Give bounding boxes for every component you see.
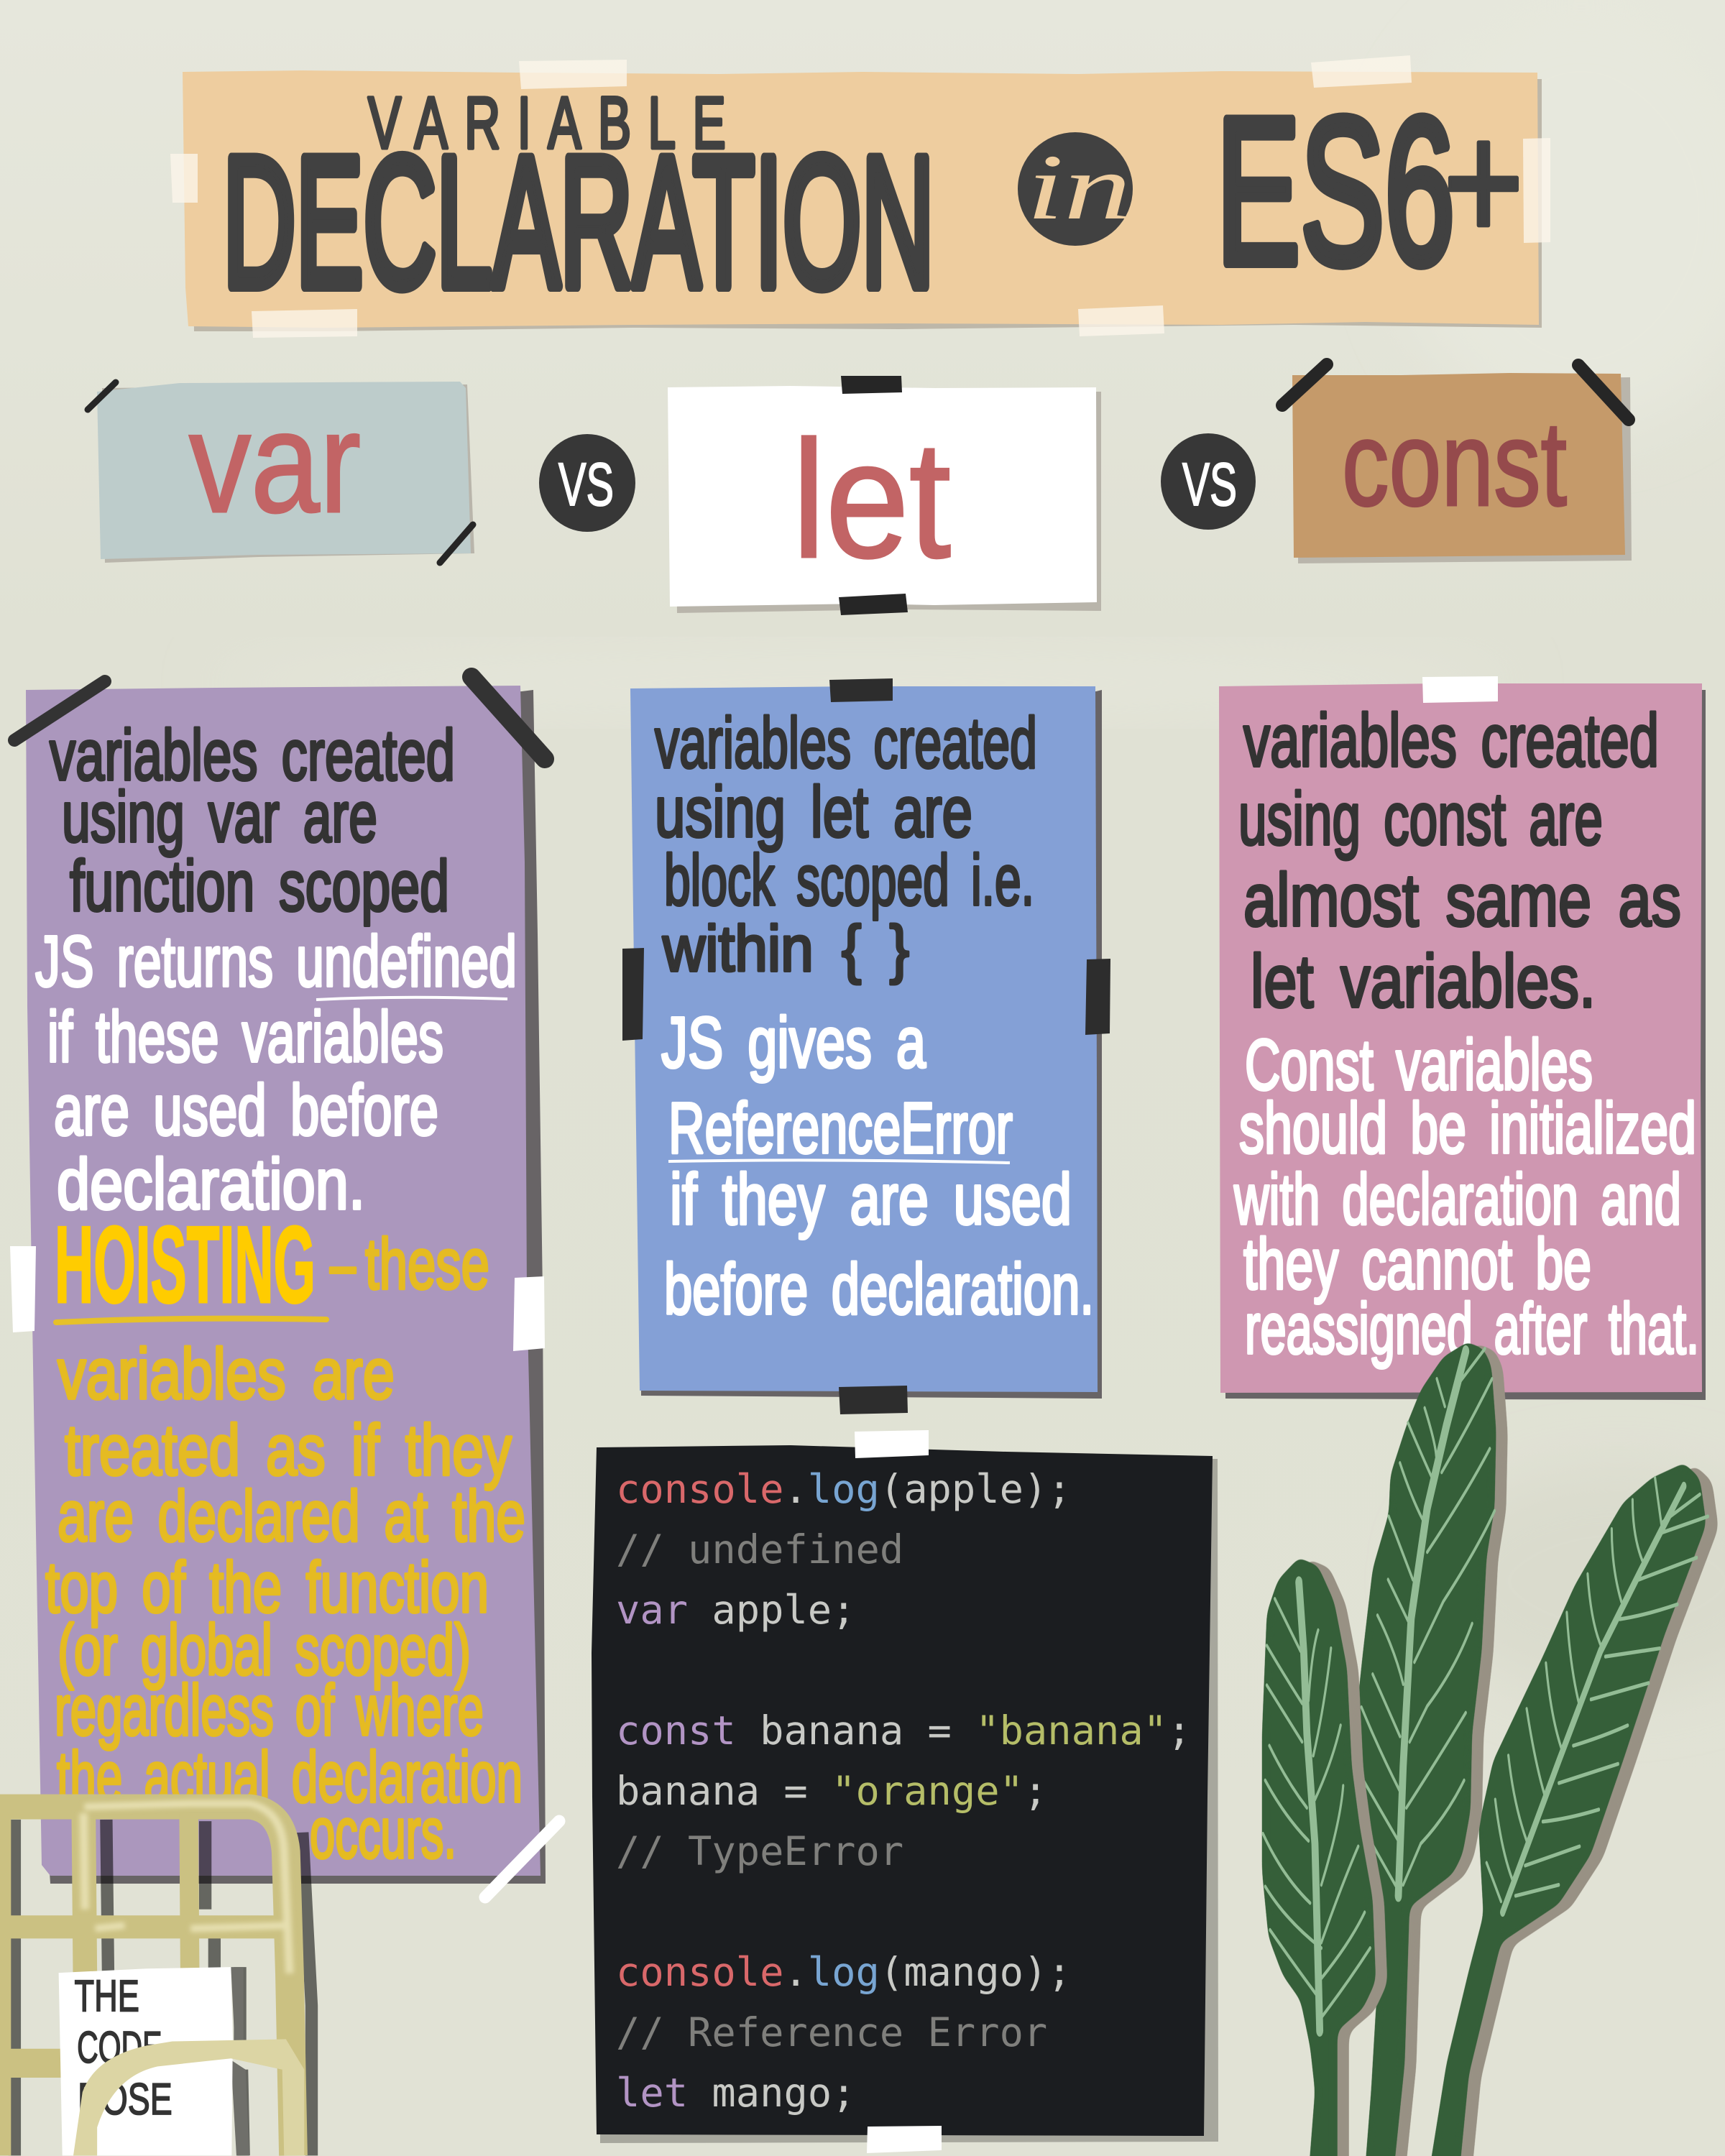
tape: var corners xyxy=(88,382,473,563)
panel: const description xyxy=(1219,676,1706,1400)
icon: vs badge 1: VS xyxy=(558,451,614,518)
text: var scope: function scoped xyxy=(70,846,449,926)
leaf: centre xyxy=(1352,1342,1508,2156)
code lines xyxy=(616,1467,1191,2116)
text: let: let xyxy=(792,407,951,593)
tape: code panel xyxy=(855,1430,942,2153)
text: hoisting explanation: treated as if they xyxy=(65,1410,512,1491)
rack highlights xyxy=(83,1804,290,1973)
brand card xyxy=(59,1967,249,2155)
text: hoisting explanation: occurs. xyxy=(310,1793,456,1874)
text: reference error note: JS gives a xyxy=(661,1003,926,1083)
icon: vs badge 1 xyxy=(539,434,635,532)
text: undefined note xyxy=(35,921,517,1225)
text: hoisting explanation: top of the function xyxy=(45,1547,489,1628)
text: hoisting explanation: regardless of where xyxy=(55,1670,484,1751)
rack bars xyxy=(0,1807,293,2155)
icon: in badge: in xyxy=(1026,136,1131,239)
text: let scope xyxy=(655,703,1037,985)
tape: let panel xyxy=(622,678,1110,1414)
text: hoisting explanation: (or global scoped) xyxy=(58,1610,471,1690)
brand card: THE xyxy=(75,1971,139,2022)
code lines: // Reference Error xyxy=(616,2010,1047,2056)
text: hoisting explanation xyxy=(45,1224,525,1874)
text: undefined note: declaration. xyxy=(57,1144,365,1225)
panel: const label xyxy=(1282,364,1632,563)
tape: const corners xyxy=(1282,364,1629,420)
code lines: let mango; xyxy=(616,2070,855,2116)
text: hoisting explanation: the actual declaration xyxy=(57,1737,523,1818)
panel: title banner xyxy=(170,55,1550,338)
panel: code sample xyxy=(592,1430,1218,2153)
heading: HOISTING xyxy=(55,1204,326,1326)
tape: let top and bottom xyxy=(839,376,908,615)
illustration: gold rack with brand card xyxy=(0,1804,312,2155)
heading: DECLARATION: DECLARATION xyxy=(223,118,934,326)
icon: vs badge 2: VS xyxy=(1182,451,1237,518)
brand card: CODE xyxy=(77,2022,162,2073)
code lines: // TypeError xyxy=(616,1829,903,1875)
panel: let description xyxy=(622,678,1110,1414)
tape: var panel dark corners xyxy=(14,677,545,759)
text: var: var xyxy=(189,382,361,543)
heading: ES6+: ES6 xyxy=(1216,75,1455,308)
code lines: var apple; xyxy=(616,1588,855,1634)
tape: const panel top xyxy=(1422,676,1498,703)
code lines: const banana = "banana"; xyxy=(616,1708,1191,1754)
leaf: right xyxy=(1429,1463,1719,2156)
text: hoisting explanation: are declared at the xyxy=(58,1476,525,1557)
icon: in badge xyxy=(1018,132,1133,246)
title tapes xyxy=(170,55,1550,338)
text: let scope: within { } xyxy=(662,913,909,985)
text: reference error note: ReferenceError xyxy=(668,1088,1013,1169)
panel: let label xyxy=(668,376,1101,615)
panel: var description xyxy=(10,677,559,1897)
text: var scope: using var are xyxy=(62,777,377,857)
text: reference error note xyxy=(661,1003,1094,1330)
code lines: banana = "orange"; xyxy=(616,1769,1047,1815)
illustration: plant leaves xyxy=(1262,1342,1719,2156)
code lines: console.log(mango); xyxy=(616,1950,1072,1996)
text: undefined note: are used before xyxy=(54,1070,438,1151)
text: let scope: using let are xyxy=(655,772,972,852)
text: var scope xyxy=(50,715,455,926)
heading: ES6+: + xyxy=(1443,87,1524,276)
rack shadow xyxy=(14,1820,312,2155)
brand card: DOSE xyxy=(78,2074,172,2124)
code lines: // undefined xyxy=(616,1527,903,1573)
text: hoisting explanation: these xyxy=(365,1224,489,1304)
text: hoisting explanation: variables are xyxy=(58,1334,395,1414)
leaf: left xyxy=(1262,1557,1387,2156)
text: const scope xyxy=(1238,699,1681,1023)
heading: HOISTING: HOISTING xyxy=(55,1204,316,1326)
text: hoisting explanation: – xyxy=(330,1224,356,1304)
text: let scope: variables created xyxy=(655,703,1037,783)
text: reference error note: before declaration. xyxy=(664,1249,1094,1330)
rack front arch xyxy=(73,2039,304,2155)
text: let scope: block scoped i.e. xyxy=(664,840,1034,921)
text: var scope: variables created xyxy=(50,715,455,796)
text: const rules xyxy=(1233,1025,1699,1369)
text: const scope: let variables. xyxy=(1251,940,1596,1023)
text: reference error note: if they are used xyxy=(670,1159,1072,1240)
icon: vs badge 2 xyxy=(1161,433,1256,530)
text: undefined note: if these variables xyxy=(47,997,443,1077)
panel: var label xyxy=(88,382,474,563)
heading: VARIABLE: VARIABLE xyxy=(368,83,726,164)
code lines: console.log(apple); xyxy=(616,1467,1072,1513)
tape: var panel white strips xyxy=(10,1246,559,1897)
text: undefined note: JS returns undefined xyxy=(35,921,517,1002)
text: const: const xyxy=(1342,396,1567,531)
